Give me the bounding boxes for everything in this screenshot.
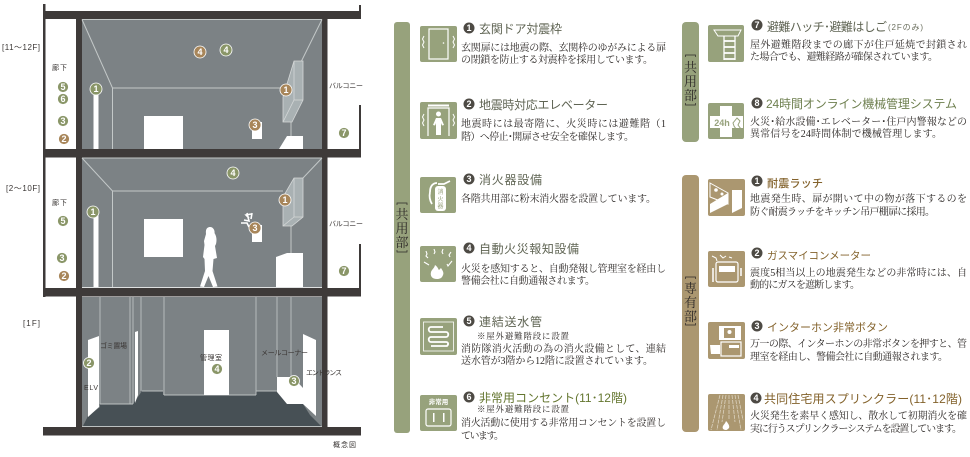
icon: cabinet latch	[708, 179, 745, 216]
panel: private area sidebar: 専	[684, 281, 697, 296]
room labels: バルコニー	[329, 220, 363, 228]
panel: private area sidebar	[682, 175, 699, 432]
icon: extinguisher: 火	[437, 196, 444, 203]
badge 6	[464, 392, 474, 402]
text block: 火災･給水設備･エレベーター･住戸内警報などの	[750, 115, 967, 128]
heading: 消火器設備	[479, 173, 542, 187]
room labels: 廊下	[52, 63, 67, 72]
text block	[461, 117, 666, 143]
badge 4	[750, 392, 762, 404]
icon: intercom	[708, 322, 745, 359]
item: gas meter	[708, 248, 967, 291]
diagram marker numerals: 1	[93, 84, 99, 94]
badge 3: 3	[754, 321, 760, 331]
diagram marker numerals: 1	[282, 195, 288, 205]
icon: meter	[708, 251, 745, 287]
floor labels	[2, 43, 40, 328]
text block	[461, 41, 666, 66]
panel: common area sidebar, column 2: 共	[684, 60, 697, 75]
badge 6: 6	[466, 392, 472, 402]
item: intercom emergency button	[708, 320, 967, 363]
room labels: ELV	[84, 385, 98, 392]
text block: 火災を感知すると、自動発報し管理室を経由し	[461, 262, 666, 275]
item: sprinkler	[708, 392, 967, 435]
badge 1	[464, 22, 474, 34]
panel: common area sidebar, column 2: 用	[684, 74, 697, 89]
icon: extinguisher: 器	[437, 203, 444, 210]
room labels: 廊下	[52, 198, 67, 207]
text block	[750, 192, 967, 218]
badge 3: 3	[466, 174, 472, 184]
diagram marker numerals	[59, 45, 347, 386]
room: 2-10F	[82, 158, 322, 288]
heading: 24時間オンライン機械管理システム	[766, 96, 957, 111]
badge 4	[464, 242, 474, 254]
item: earthquake elevator	[420, 98, 666, 143]
room labels	[52, 63, 363, 449]
item: automatic fire alarm	[420, 242, 666, 287]
badge 1: 1	[754, 176, 760, 186]
diagram marker numerals: 3	[252, 223, 258, 233]
badge 3	[464, 174, 474, 184]
icon: extinguisher: 消	[437, 188, 444, 196]
text block	[461, 416, 666, 442]
badge 4: 4	[753, 393, 759, 403]
room: 11-12F	[82, 20, 322, 149]
item: seismic latch	[708, 176, 967, 218]
text block: の閉鎖を防止する対震枠を採用しています。	[461, 53, 653, 66]
diagram marker numerals: 5	[60, 216, 66, 226]
item: entrance door frame	[420, 22, 666, 66]
heading: 連結送水管	[479, 314, 542, 329]
icon: coiled pipe	[420, 318, 457, 355]
text block: 理室を経由し、警備会社に自動通報されます。	[750, 350, 948, 363]
heading: 共同住宅用スプリンクラー(11･12階)	[764, 392, 962, 406]
text block: 実に行うスプリンクラーシステムを設置しています。	[750, 422, 962, 435]
text block	[461, 342, 666, 367]
room labels: 管理室	[200, 353, 222, 362]
room labels: ゴミ置場	[100, 341, 127, 350]
text block: 異常信号を24時間体制で機械管理します。	[750, 127, 942, 140]
text block	[461, 262, 666, 287]
text block: 震度5相当以上の地震発生などの非常時には、自	[750, 266, 967, 279]
room labels: メールコーナー	[261, 349, 308, 357]
badge 5	[464, 316, 474, 326]
note: ※屋外避難階段に設置	[477, 404, 569, 414]
floor labels: [2～10F]	[6, 184, 40, 193]
badge 2: 2	[754, 248, 760, 258]
panel: common area sidebar, column 1: 共	[395, 207, 409, 222]
room labels: バルコニー	[329, 82, 363, 90]
icon: ladder	[708, 25, 744, 62]
badge 7: 7	[754, 20, 760, 30]
text block: 警備会社に自動通報されます。	[461, 274, 595, 287]
building section diagram	[2, 4, 363, 449]
text block: 火災発生を素早く感知し、散水して初期消火を確	[750, 409, 967, 422]
text block: 消防隊消火活動の為の消火設備として、連結	[461, 342, 666, 355]
diagram marker numerals: 4	[223, 45, 229, 55]
icon: outlet: 非常用	[429, 397, 448, 406]
heading: 避難ハッチ･避難はしご	[767, 19, 887, 34]
person silhouette	[200, 227, 218, 287]
diagram marker numerals: 5	[60, 82, 66, 92]
icon: door	[420, 26, 457, 62]
diagram marker numerals: 3	[59, 253, 65, 263]
panel: common area sidebar, column 2	[682, 22, 699, 142]
badge 2: 2	[466, 99, 472, 109]
diagram marker numerals: 2	[86, 358, 92, 368]
diagram marker numerals: 3	[291, 376, 297, 386]
text block: 万一の際、インターホンの非常ボタンを押すと、管	[750, 337, 967, 350]
heading: 地震時対応エレベーター	[479, 98, 608, 112]
diagram marker numerals: 7	[341, 128, 347, 138]
heading: 非常用コンセント(11･12階)	[479, 391, 627, 405]
icon: extinguisher	[420, 177, 456, 213]
floor labels: [1F]	[23, 319, 40, 328]
panel: private area sidebar: 有	[684, 295, 697, 310]
text block: 各階共用部に粉末消火器を設置しています。	[461, 192, 656, 205]
icon: flame and alarm	[420, 246, 456, 282]
badge 1: 1	[466, 23, 472, 33]
text block	[750, 38, 967, 63]
badge 2	[752, 248, 762, 258]
room labels: エントランス	[306, 369, 342, 377]
diagram marker numerals: 1	[283, 85, 289, 95]
panel: private area sidebar: 部	[684, 309, 697, 324]
diagram marker numerals: 6	[60, 94, 66, 104]
diagram marker numerals: 4	[197, 47, 203, 57]
text block: た場合でも、避難経路が確保されています。	[750, 50, 938, 63]
badge 3	[752, 320, 762, 332]
diagram marker numerals: 7	[341, 266, 347, 276]
heading: 耐震ラッチ	[767, 177, 823, 190]
diagram marker numerals: 1	[90, 207, 96, 217]
item: emergency outlet	[420, 391, 666, 442]
diagram marker numerals: 4	[214, 364, 220, 374]
badge 7	[752, 20, 762, 30]
diagram number markers	[56, 44, 350, 386]
panel: common area sidebar, column 1	[394, 22, 410, 433]
outer wall and floor slabs	[43, 4, 361, 436]
diagram marker numerals: 3	[252, 120, 258, 130]
diagram marker numerals: 2	[61, 134, 67, 144]
heading: 自動火災報知設備	[479, 242, 579, 256]
badge 2	[464, 98, 474, 110]
diagram marker numerals: 4	[230, 168, 236, 178]
floor labels: [11～12F]	[2, 43, 40, 52]
item: connected water pipe	[420, 314, 666, 367]
text block: 玄関扉には地震の際、玄関枠のゆがみによる扉	[461, 41, 666, 54]
heading: インターホン非常ボタン	[767, 321, 888, 334]
icon: 24h cross: 24h	[714, 118, 730, 128]
diagram marker numerals: 3	[60, 116, 66, 126]
text block: 防ぐ耐震ラッチをキッチン吊戸棚扉に採用。	[750, 205, 935, 218]
panel: common area sidebar, column 1: 部	[395, 235, 409, 250]
item: fire extinguisher	[420, 173, 656, 213]
badge 8	[752, 98, 762, 108]
heading: ガスマイコンメーター	[767, 250, 871, 262]
text block: 動的にガスを遮断します。	[750, 278, 860, 291]
panel: common area sidebar, column 2: 部	[684, 88, 697, 103]
text block	[750, 337, 967, 363]
note: ※屋外避難階段に設置	[477, 331, 569, 341]
badge 4: 4	[466, 243, 472, 253]
alarm sparks	[241, 213, 252, 227]
icon: sprinkler	[708, 394, 745, 431]
icon: outlet	[420, 395, 457, 431]
text block: ています。	[461, 430, 504, 442]
panel: common area sidebar, column 1: 用	[395, 221, 409, 236]
text block: 地震時には最寄階に、火災時には避難階（1	[461, 117, 666, 130]
item: 24h monitoring	[708, 96, 967, 140]
text block	[750, 266, 967, 291]
text block	[750, 409, 967, 435]
badge 8: 8	[754, 98, 760, 108]
heading note: (2Fのみ)	[888, 23, 923, 32]
text block	[750, 115, 967, 140]
text block: 屋外避難階段までの廊下が住戸延焼で封鎖され	[750, 38, 967, 51]
badge 1	[752, 176, 762, 186]
room: 1F lobby	[82, 297, 322, 426]
icon: elevator	[420, 102, 457, 139]
diagram marker numerals: 2	[61, 271, 67, 281]
text block: 送水管が3階から12階に設置されています。	[461, 354, 653, 367]
heading: 玄関ドア対震枠	[479, 22, 562, 36]
item: escape hatch	[708, 19, 967, 63]
icon: 24h cross	[708, 103, 744, 139]
text block: 消火活動に使用する非常用コンセントを設置し	[461, 416, 666, 429]
text block: 階）へ停止･開扉させ安全を確保します。	[461, 130, 634, 143]
room labels: 概念図	[333, 440, 356, 449]
text block: 地震発生時、扉が開いて中の物が落下するのを	[750, 192, 967, 205]
badge 5: 5	[466, 316, 472, 326]
